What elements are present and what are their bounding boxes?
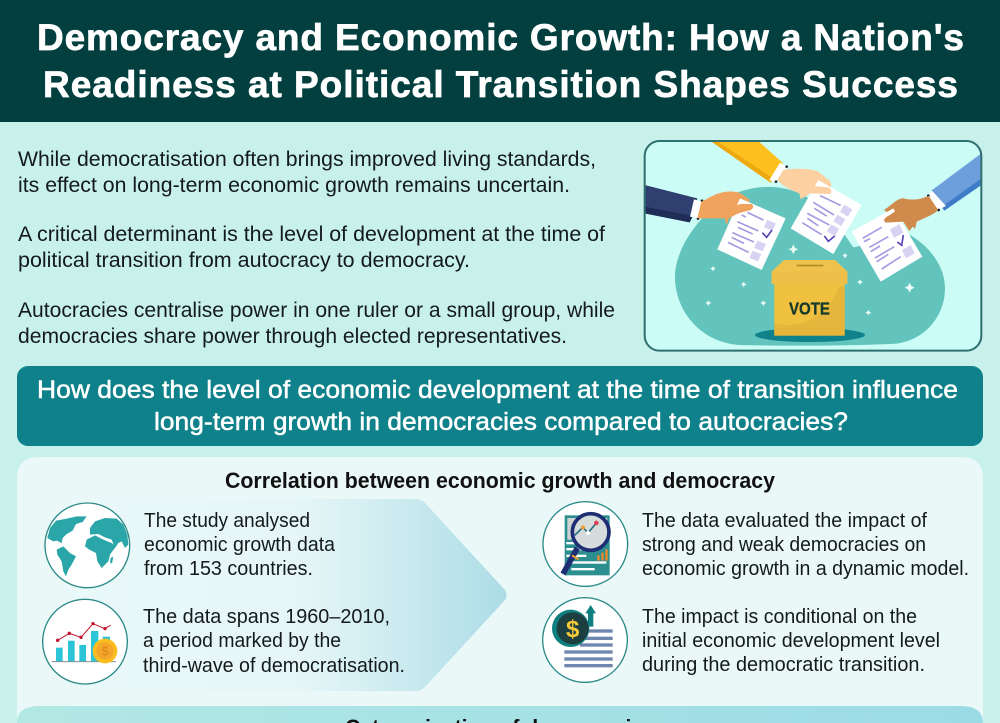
icon: dollar with rising arrow: $ (566, 616, 579, 643)
panel heading: Correlation between economic growth and democracy (225, 468, 776, 493)
header band with title: Readiness at Political Transition Shapes Success (43, 64, 958, 105)
panel: correlation (17, 457, 983, 723)
intro text: democracies share power through elected representatives. (18, 325, 567, 348)
icon: dollar with rising arrow (543, 598, 627, 682)
text: study scope: economic growth data (144, 533, 336, 556)
icon: bar chart with coin (43, 599, 127, 684)
chevron arrow (30, 499, 506, 691)
intro text: Autocracies centralise power in one ruler or a small group, while (18, 299, 615, 322)
panel: categorisation of democracies (17, 706, 983, 723)
vote label: VOTE (789, 298, 830, 318)
question banner: How does the level of economic development at the time of transition influence (37, 376, 958, 404)
text: study scope: from 153 countries. (144, 557, 313, 580)
intro text: A critical determinant is the level of development at the time of (18, 223, 605, 246)
text: data period: third-wave of democratisation. (143, 654, 405, 677)
text: conditional impact (642, 605, 940, 676)
icon: globe (45, 503, 130, 588)
text: model evaluation: economic growth in a dynamic model. (642, 557, 969, 580)
illustration: hands casting votes (645, 141, 981, 351)
text: data period: a period marked by the (143, 629, 341, 652)
text: data period: The data spans 1960–2010, (143, 605, 390, 628)
icon: magnifier over report (543, 502, 628, 586)
text: conditional impact: during the democratic transition. (642, 653, 925, 676)
text: data period (143, 605, 405, 677)
text: study scope: The study analysed (144, 509, 310, 532)
intro text: its effect on long-term economic growth remains uncertain. (18, 174, 570, 197)
intro text (18, 148, 615, 348)
text: conditional impact: initial economic development level (642, 629, 940, 652)
question banner: long-term growth in democracies compared to autocracies? (154, 408, 848, 436)
question banner (17, 366, 983, 446)
icon: bar chart with coin: $ (101, 645, 109, 659)
intro text: While democratisation often brings improved living standards, (18, 148, 596, 171)
text: conditional impact: The impact is conditional on the (642, 605, 917, 628)
intro text: political transition from autocracy to democracy. (18, 249, 470, 272)
text: study scope (144, 509, 336, 580)
text: model evaluation: strong and weak democracies on (642, 533, 926, 556)
text: model evaluation: The data evaluated the impact of (642, 509, 927, 532)
header band with title: Democracy and Economic Growth: How a Nation's (37, 17, 964, 58)
text: model evaluation (642, 509, 969, 580)
header band with title (0, 0, 1000, 122)
